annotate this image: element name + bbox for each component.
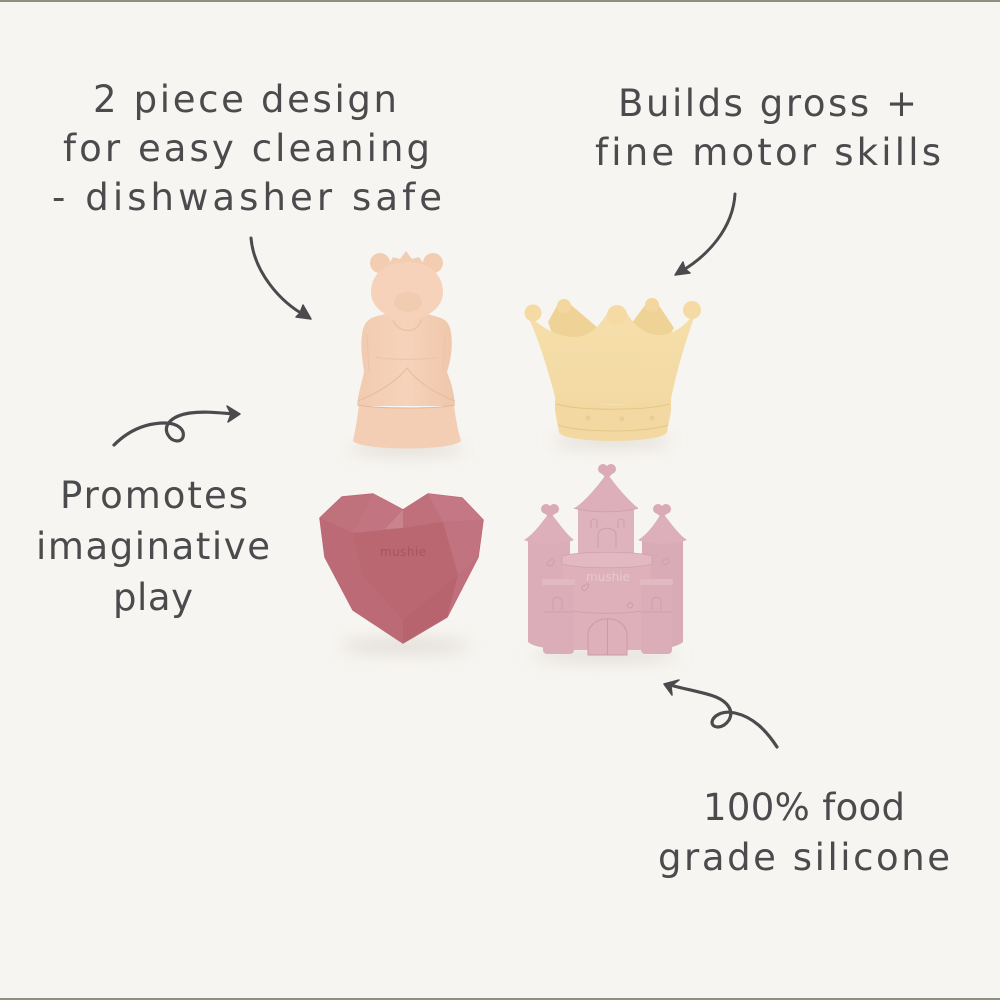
heart logo: mushie <box>380 545 426 559</box>
text: 100% food grade silicone <box>658 786 950 879</box>
castle door <box>588 619 627 655</box>
arrow: to bear <box>251 238 311 319</box>
heart outline <box>320 494 483 643</box>
text: 2 piece design for easy cleaning - dishwasher safe <box>52 78 442 219</box>
toy: faceted heart <box>320 494 483 653</box>
text: 100% food grade silicone: 100% food <box>703 786 905 829</box>
text: 2 piece design for easy cleaning - dishwasher safe: 2 piece design <box>93 78 397 121</box>
crown band <box>555 399 671 441</box>
text: 2 piece design for easy cleaning - dishwasher safe: - dishwasher safe <box>52 176 442 219</box>
bear base <box>353 405 461 448</box>
crown front <box>527 310 696 404</box>
castle front turrets <box>543 580 574 654</box>
text: builds gross + fine motor skills <box>595 82 941 174</box>
heart facets <box>353 494 403 533</box>
text: promotes imaginative play: play <box>113 576 193 619</box>
castle logo: mushie <box>586 570 630 584</box>
text: 100% food grade silicone: grade silicone <box>658 836 950 879</box>
bear dress <box>357 312 455 406</box>
text: 2 piece design for easy cleaning - dishwasher safe: for easy cleaning <box>63 127 430 170</box>
castle windows and hearts <box>547 519 669 610</box>
castle main keep <box>563 560 651 650</box>
crown back points <box>548 304 674 345</box>
text: builds gross + fine motor skills: Builds gross + <box>618 82 917 125</box>
text: promotes imaginative play <box>36 474 270 619</box>
toy: princess bear <box>349 251 465 455</box>
arrow: looped to toys from promotes <box>114 406 240 445</box>
castle heart finials <box>541 464 671 518</box>
castle central tower <box>578 505 634 560</box>
text: promotes imaginative play: Promotes <box>60 474 248 517</box>
castle side towers <box>528 538 570 648</box>
arrow: to crown <box>675 194 735 275</box>
text: builds gross + fine motor skills: fine motor skills <box>595 131 941 174</box>
text: promotes imaginative play: imaginative <box>36 525 270 568</box>
arrow: looped to castle from silicone <box>664 680 777 747</box>
bear head <box>371 262 443 319</box>
toy: castle <box>524 464 687 662</box>
bear ears and tiara <box>370 251 443 273</box>
toy: crown <box>524 298 701 447</box>
